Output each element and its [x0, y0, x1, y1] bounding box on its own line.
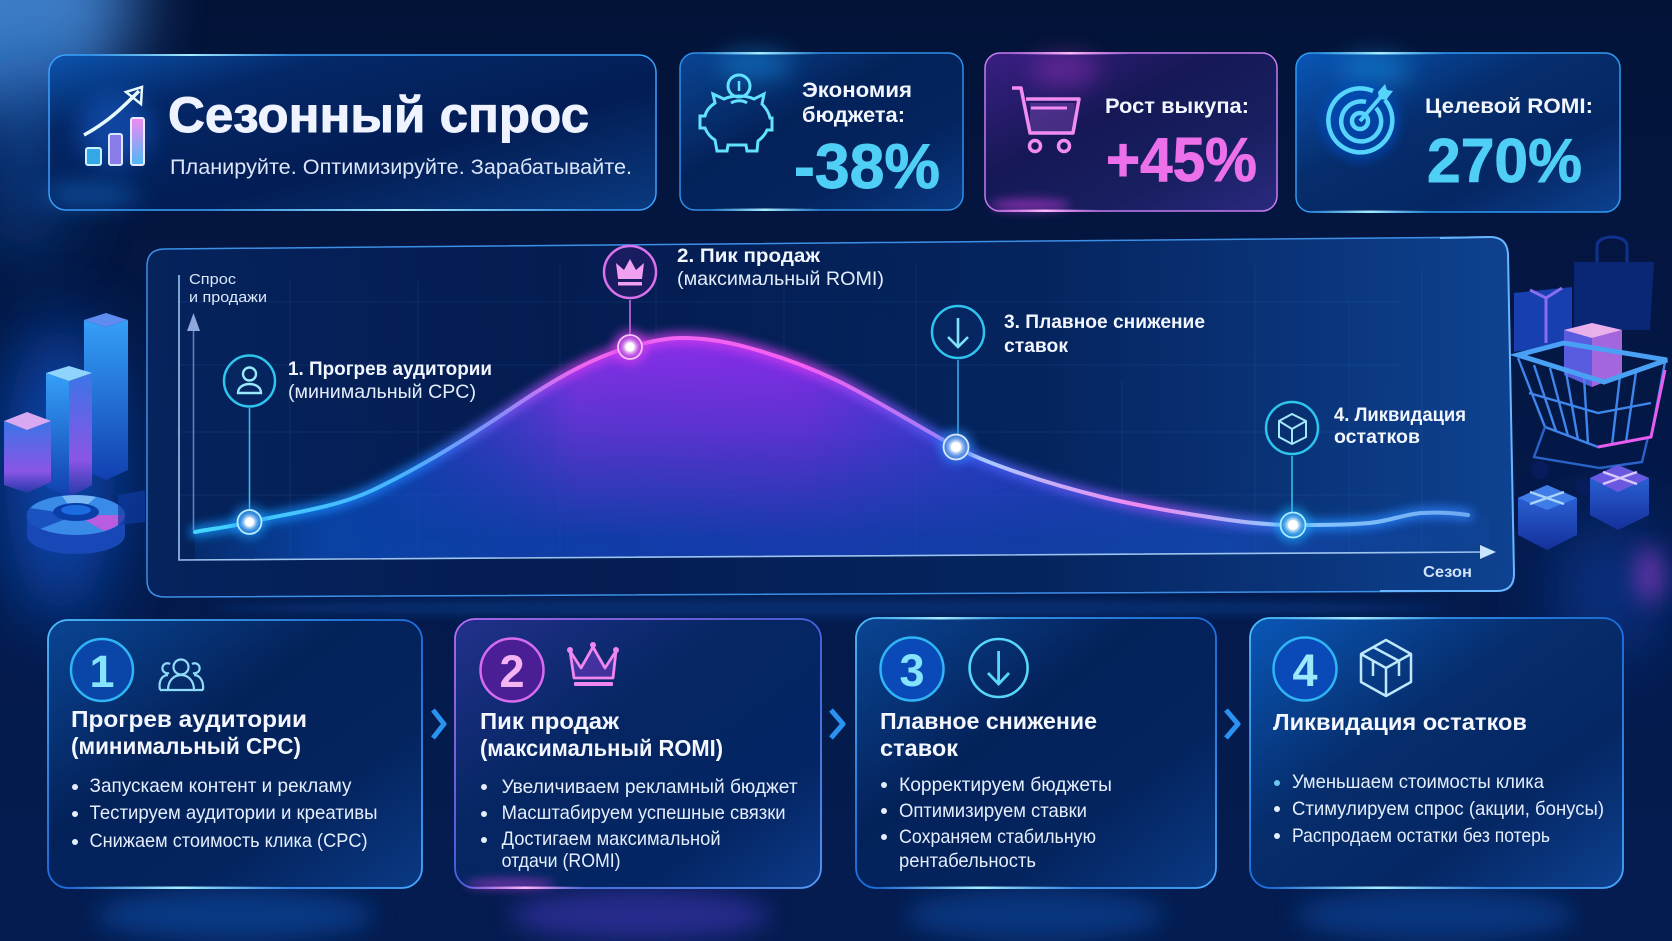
list: step 3 actions: Оптимизируем ставки — [899, 800, 1087, 822]
left decoration: 3D bars and donut — [4, 313, 145, 554]
list: step 2 actions: Масштабируем успешные связки — [502, 802, 786, 824]
chart grid — [180, 265, 1422, 555]
icon: shopping cart — [1012, 88, 1079, 152]
panel: step 3 card — [856, 617, 1216, 889]
axis label: demand and sales — [189, 271, 267, 306]
list: step 3 actions: Сохраняем стабильную — [899, 826, 1096, 848]
label: target ROMI: Целевой ROMI: — [1425, 95, 1593, 118]
list: step 3 actions: рентабельность — [899, 850, 1036, 872]
label: budget savings: бюджета: — [802, 104, 905, 127]
icon: parcel box — [1361, 640, 1411, 696]
badge: number 4: 4 — [1292, 645, 1318, 696]
value: +45%: +45% — [1106, 126, 1257, 195]
axis label: season: Сезон — [1423, 564, 1472, 581]
badge: number 3: 3 — [899, 645, 925, 696]
label: step 4 — [1334, 405, 1466, 448]
marker 1 — [224, 356, 275, 539]
badge: number 2 — [480, 638, 544, 702]
label: step 4: 4. Ликвидация — [1334, 405, 1466, 426]
list: step 3 actions — [881, 774, 1112, 872]
badge: number 1: 1 — [89, 646, 115, 697]
arrow: step 3 to 4 — [1226, 710, 1238, 738]
badge: number 4 — [1274, 638, 1336, 700]
arrow: step 1 to 2 — [433, 710, 444, 738]
panel: demand chart — [147, 237, 1514, 597]
label: step 2: 2. Пик продаж — [677, 246, 821, 267]
panel: step 2 card — [455, 619, 821, 889]
marker 2 — [604, 246, 656, 364]
list: step 4 actions: Распродаем остатки без потерь — [1292, 825, 1550, 847]
heading: step 3: ставок — [880, 735, 958, 761]
badge: number 3 — [880, 638, 944, 700]
list: step 2 actions: Достигаем максимальной — [502, 828, 721, 850]
heading: step 1: Прогрев аудитории — [71, 706, 307, 732]
axis label: demand and sales: Спрос — [189, 271, 237, 288]
area under curve — [195, 338, 1490, 559]
list: step 1 actions: Снижаем стоимость клика (CPC) — [90, 830, 368, 852]
heading: step 1 — [71, 706, 307, 759]
label: step 1: (минимальный CPC) — [288, 382, 476, 403]
value: 270%: 270% — [1427, 127, 1582, 196]
panel: buyout growth — [985, 52, 1277, 212]
label: budget savings: Экономия — [802, 79, 912, 102]
list: step 1 actions: Тестируем аудитории и креативы — [90, 802, 378, 824]
list: step 2 actions — [481, 776, 798, 872]
panel: budget savings — [680, 51, 963, 211]
right decoration: shopping cart, bag and boxes — [1514, 237, 1667, 603]
list: step 1 actions — [72, 775, 378, 852]
arrow: step 2 to 3 — [831, 710, 843, 738]
panel: step 1 card — [48, 620, 422, 889]
badge: number 1 — [71, 639, 133, 701]
heading: step 2: (максимальный ROMI) — [480, 735, 723, 761]
list: step 3 actions: Корректируем бюджеты — [899, 774, 1112, 796]
list: step 4 actions — [1274, 771, 1604, 847]
panel: title — [40, 54, 656, 211]
heading: title: Сезонный спрос — [168, 87, 589, 143]
heading: step 1: (минимальный CPC) — [71, 733, 301, 759]
label: step 3: 3. Плавное снижение — [1004, 312, 1205, 333]
axes — [179, 275, 1496, 560]
icon: growth chart — [79, 87, 151, 166]
icon: target — [1320, 81, 1400, 161]
icon: piggy bank — [700, 75, 772, 151]
badge: number 2: 2 — [499, 646, 525, 697]
label: budget savings — [802, 79, 912, 127]
heading: step 2 — [480, 708, 723, 761]
heading: step 3: Плавное снижение — [880, 708, 1097, 734]
panel: step 4 card — [1250, 617, 1623, 889]
label: step 2 — [677, 246, 884, 290]
label: step 1: 1. Прогрев аудитории — [288, 359, 492, 380]
axis label: demand and sales: и продажи — [189, 289, 267, 306]
icon: crown — [567, 642, 619, 686]
heading: step 3 — [880, 708, 1097, 761]
label: buyout growth: Рост выкупа: — [1105, 95, 1249, 118]
list: step 2 actions: Увеличиваем рекламный бюджет — [502, 776, 798, 798]
list: step 4 actions: Стимулируем спрос (акции, бонусы) — [1292, 798, 1604, 820]
label: step 4: остатков — [1334, 427, 1420, 448]
heading: step 2: Пик продаж — [480, 708, 620, 734]
icon: audience — [160, 660, 203, 690]
marker 3 — [932, 306, 984, 464]
label: step 3: ставок — [1004, 336, 1068, 357]
label: step 3 — [1004, 312, 1205, 357]
panel: target ROMI — [1296, 52, 1620, 213]
value: -38%: -38% — [794, 132, 940, 202]
label: step 2: (максимальный ROMI) — [677, 269, 884, 290]
list: step 2 actions: отдачи (ROMI) — [502, 850, 621, 872]
list: step 1 actions: Запускаем контент и рекламу — [90, 775, 352, 797]
demand curve — [195, 338, 1468, 532]
icon: arrow down — [970, 639, 1028, 697]
list: step 4 actions: Уменьшаем стоимосты клика — [1292, 771, 1544, 793]
subtitle: Планируйте. Оптимизируйте. Зарабатывайте. — [170, 156, 632, 179]
label: step 1 — [288, 359, 492, 403]
marker 4 — [1266, 402, 1318, 542]
heading: step 4: Ликвидация остатков — [1273, 709, 1527, 735]
